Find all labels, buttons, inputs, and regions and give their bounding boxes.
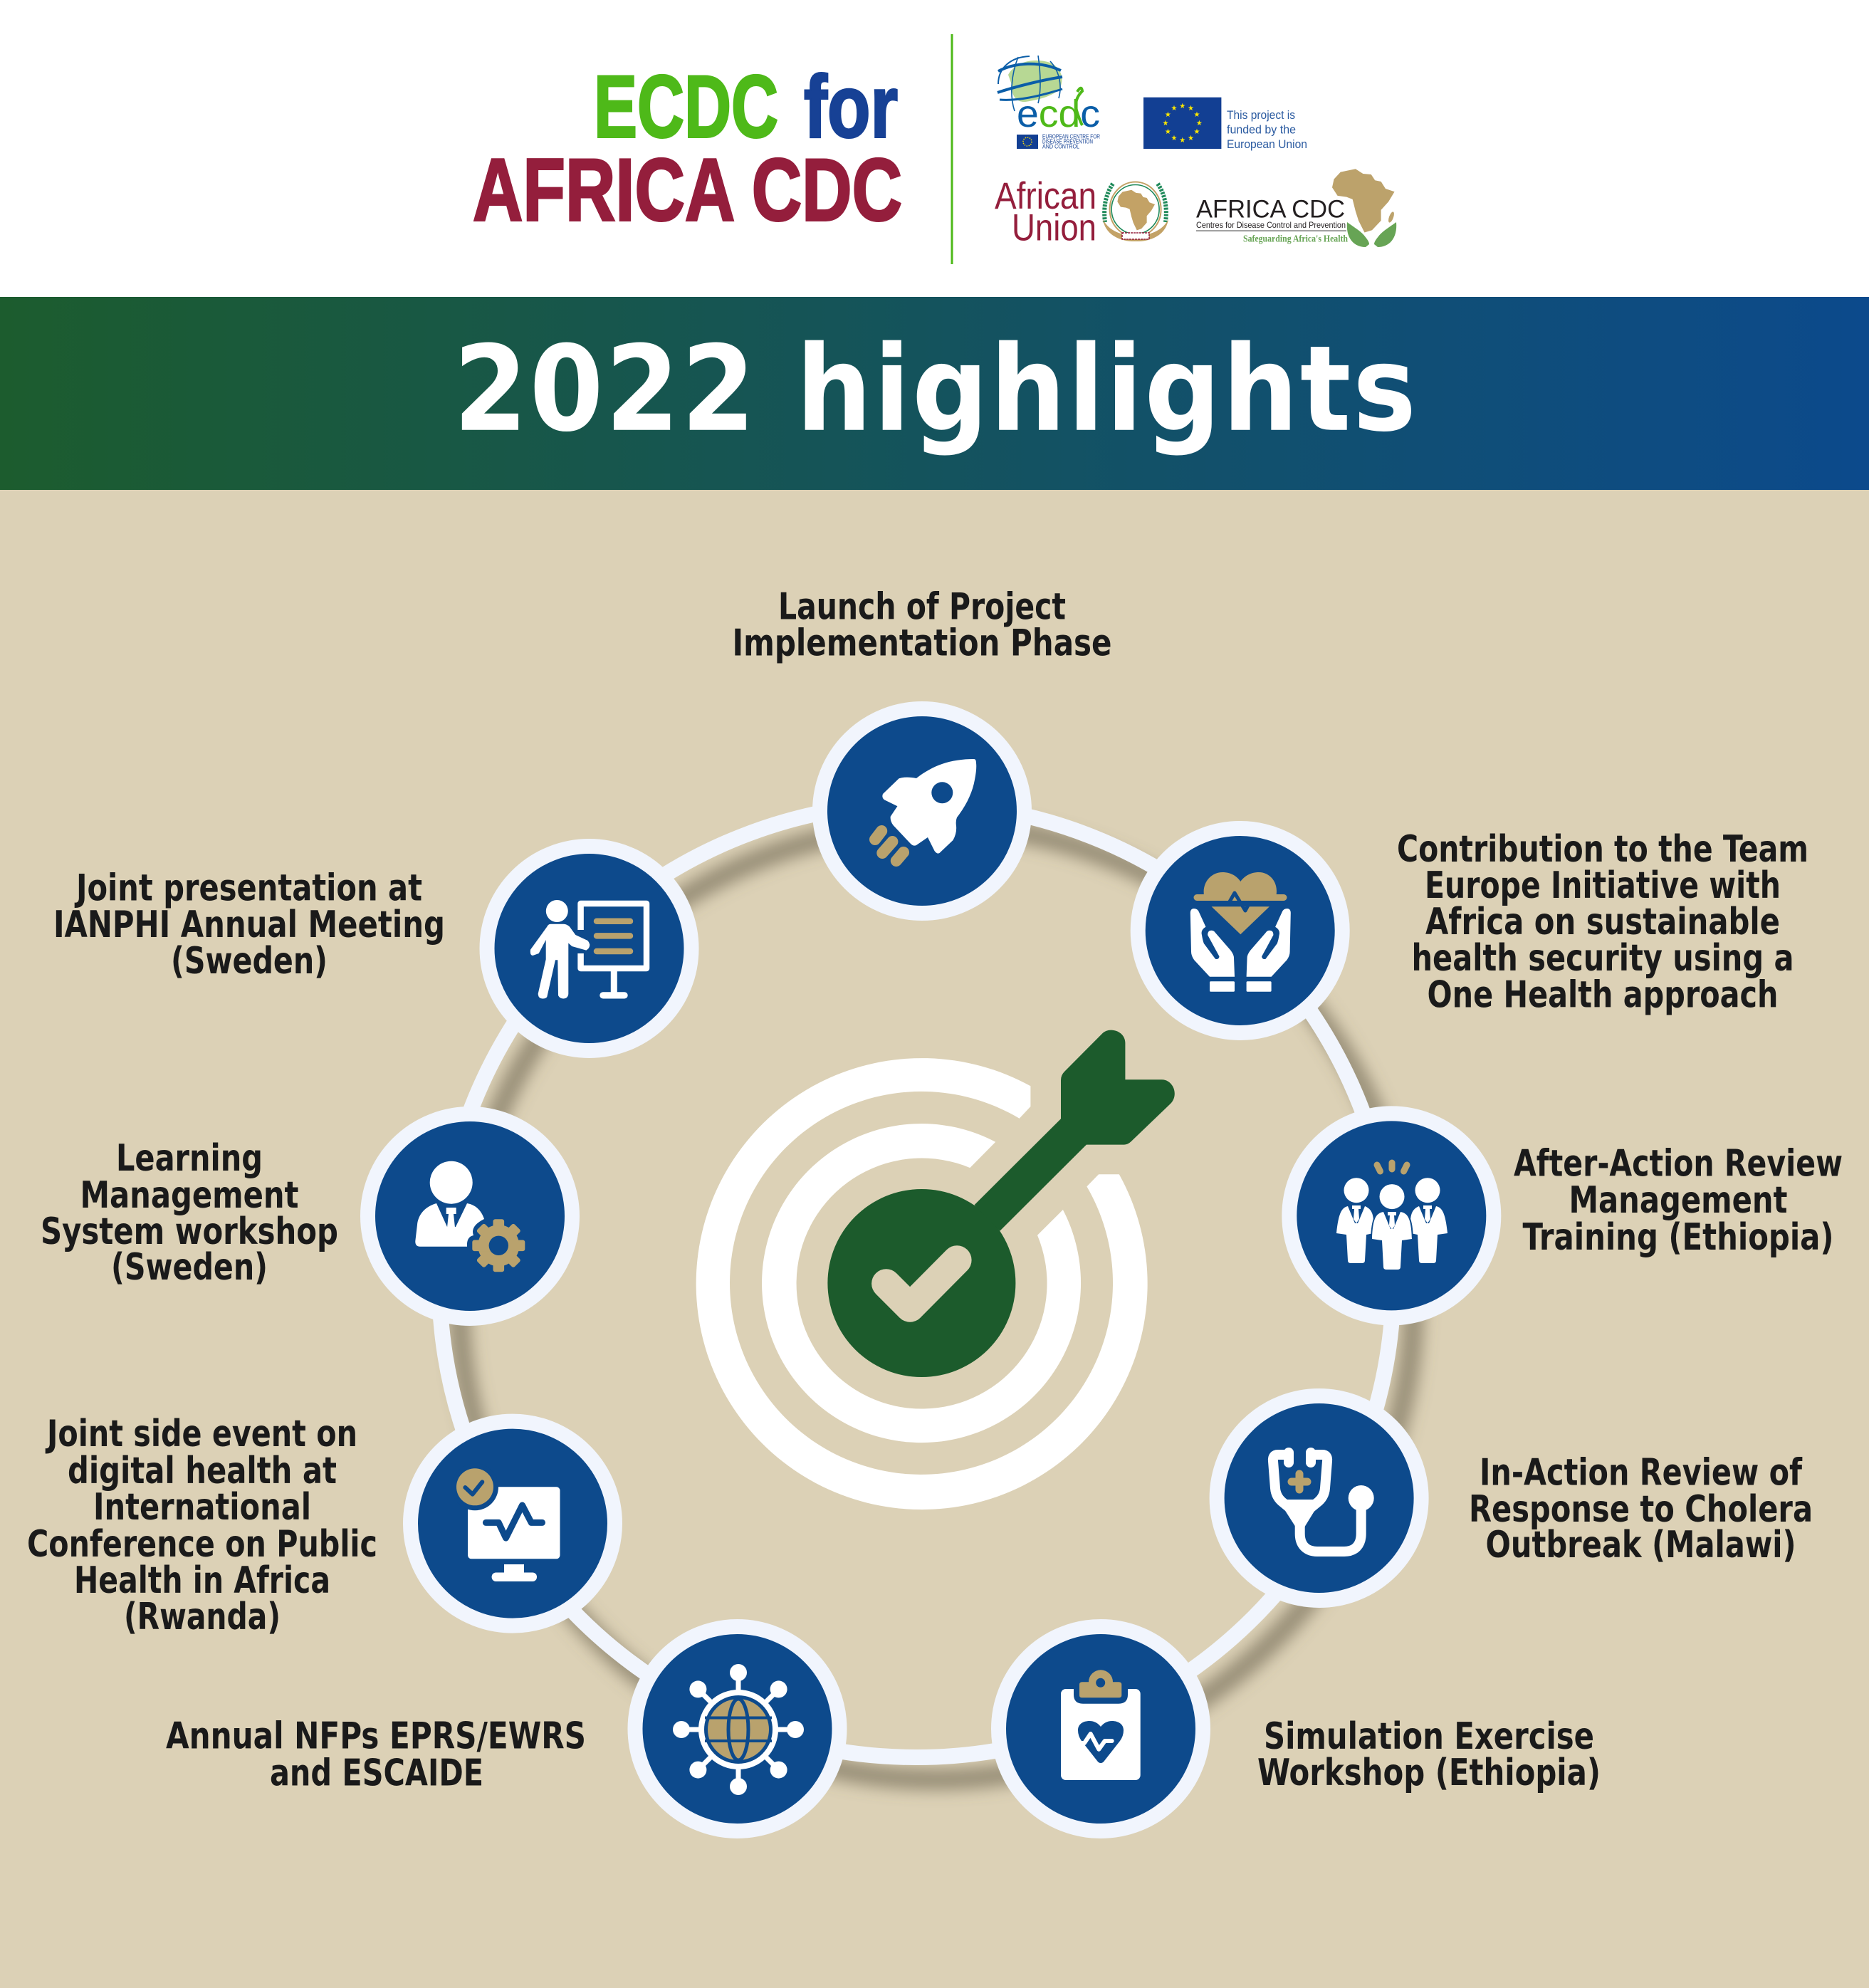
label: Joint side event on digital health: Health in Africa: [74, 1559, 330, 1602]
label: Learning Management System workshop: Management: [80, 1174, 299, 1217]
label: Annual NFPs EPRS/EWRS and ESCAIDE: and ESCAIDE: [270, 1752, 483, 1794]
logo: EU flag with funding note: ★: [1196, 120, 1203, 127]
logo: EU flag with funding note: ★: [1188, 135, 1194, 142]
title: ECDC for Africa CDC: ECDC: [594, 58, 778, 157]
logo: EU flag with funding note: European Union: [1227, 137, 1307, 151]
node 1: rocket: [820, 709, 1024, 913]
icon: person and gear: [415, 1161, 525, 1272]
node 6: networked globe: [635, 1626, 839, 1831]
logo: EU flag with funding note: [1143, 98, 1307, 151]
banner: 2022 highlights: 2022 highlights: [454, 321, 1416, 459]
node 5: clipboard with heart: [998, 1626, 1203, 1831]
label: Contribution to the Team Europe Initiative: One Health approach: [1427, 974, 1779, 1017]
label: Joint side event on digital health: International: [93, 1486, 311, 1529]
logo: African Union: [995, 175, 1168, 249]
label: Simulation Exercise Workshop: Simulation Exercise: [1264, 1715, 1594, 1758]
label: Simulation Exercise Workshop: Workshop (Ethiopia): [1257, 1752, 1601, 1794]
label: Joint presentation at IANPHI: (Sweden): [171, 940, 328, 983]
logo: EU flag with funding note: ★: [1194, 128, 1200, 136]
label: Learning Management System workshop: (Sweden): [111, 1246, 268, 1289]
logo: ECDC: AND CONTROL: [1042, 144, 1079, 150]
icon: clipboard: [1061, 1670, 1141, 1780]
label: After-Action Review Management Training: Management: [1569, 1179, 1787, 1222]
icon: rocket: [875, 759, 976, 861]
label: In-Action Review of Response to Cholera: Outbreak (Malawi): [1485, 1524, 1796, 1566]
header divider line: [951, 34, 953, 264]
icon: people: [1336, 1163, 1447, 1270]
label: Joint presentation at IANPHI: [53, 867, 445, 983]
node 2: hands holding heart: [1138, 829, 1342, 1032]
label: Joint presentation at IANPHI: IANPHI Annual Meeting: [53, 904, 445, 946]
label: Learning Management System workshop: System workshop: [41, 1210, 338, 1253]
node 8: person with gear: [367, 1114, 572, 1319]
icon: presenter: [530, 900, 646, 998]
title: ECDC for Africa CDC: AFRICA CDC: [473, 141, 902, 239]
logo: EU flag with funding note: This project is: [1227, 108, 1295, 122]
label: After-Action Review Management Training: [1514, 1142, 1843, 1259]
label: Contribution to the Team Europe Initiative: health security using a: [1411, 937, 1794, 980]
label: Contribution to the Team Europe Initiative: Europe Initiative with: [1425, 864, 1781, 907]
icon: hands and heart: [1190, 872, 1291, 992]
label: After-Action Review Management Training: Training (Ethiopia): [1522, 1216, 1834, 1259]
logo: ECDC: EUROPEAN CENTRE FOR: [1042, 134, 1100, 140]
label: Learning Management System workshop: Learning: [116, 1137, 263, 1180]
banner: 2022 highlights: [0, 297, 1869, 490]
logo: ECDC: ecdc: [1017, 93, 1100, 135]
logo: ECDC: [998, 56, 1100, 150]
label: Contribution to the Team Europe Initiative: Contribution to the Team: [1397, 828, 1808, 871]
label: Launch of Project Implementation Phase: Implementation Phase: [732, 622, 1112, 665]
node 4: stethoscope: [1217, 1396, 1421, 1601]
label: Joint side event on digital health: Joint side event on: [45, 1413, 357, 1455]
header background: [0, 0, 1869, 297]
logo: Africa CDC: [1196, 169, 1396, 247]
icon: globe: [673, 1664, 804, 1795]
label: Joint side event on digital health: Conference on Public: [27, 1523, 377, 1566]
logo: EU flag with funding note: ★: [1165, 111, 1171, 119]
icon: monitor: [451, 1463, 560, 1581]
label: Contribution to the Team Europe Initiative: [1397, 828, 1808, 1017]
logo: African Union: Union: [1012, 207, 1096, 249]
connector ring shadow: [459, 825, 1413, 1779]
title: ECDC for Africa CDC: [473, 58, 902, 239]
logo: EU flag with funding note: ★: [1179, 103, 1185, 110]
logo: Africa CDC: Safeguarding Africa's Health: [1243, 233, 1348, 244]
title: ECDC for Africa CDC: for: [804, 58, 898, 157]
logo: EU flag with funding note: ★: [1188, 105, 1194, 113]
label: Contribution to the Team Europe Initiative: Africa on sustainable: [1425, 901, 1780, 943]
connector ring: [439, 803, 1393, 1757]
logo: ECDC: DISEASE PREVENTION: [1042, 138, 1093, 145]
label: Joint presentation at IANPHI: Joint presentation at: [74, 867, 422, 910]
label: Joint side event on digital health: [27, 1413, 377, 1638]
logo: EU flag with funding note: ★: [1165, 128, 1171, 136]
label: Joint side event on digital health: digital health at: [68, 1450, 337, 1492]
label: Launch of Project Implementation Phase: [732, 585, 1112, 665]
logo: EU flag with funding note: funded by the: [1227, 123, 1296, 137]
label: In-Action Review of Response to Cholera: Response to Cholera: [1469, 1488, 1813, 1531]
logo: EU flag with funding note: ★: [1171, 105, 1178, 113]
label: Annual NFPs EPRS/EWRS and ESCAIDE: [166, 1715, 586, 1794]
label: Launch of Project Implementation Phase: Launch of Project: [778, 585, 1066, 628]
node 3: team of three: [1289, 1114, 1494, 1318]
node 7: health monitor: [410, 1421, 615, 1626]
logo: EU flag with funding note: ★: [1179, 137, 1185, 145]
sand background panel: [0, 490, 1869, 1988]
label: Annual NFPs EPRS/EWRS and ESCAIDE: Annual NFPs EPRS/EWRS: [166, 1715, 586, 1757]
label: In-Action Review of Response to Cholera: In-Action Review of: [1480, 1451, 1803, 1494]
logo: Africa CDC: AFRICA CDC: [1196, 196, 1345, 224]
label: In-Action Review of Response to Cholera: [1469, 1451, 1813, 1566]
node 9: presenter at board: [487, 846, 691, 1051]
label: Joint side event on digital health: (Rwanda): [124, 1596, 281, 1638]
logo: Africa CDC: Centres for Disease Control and Prevention: [1196, 220, 1346, 230]
logo: EU flag with funding note: ★: [1163, 120, 1169, 127]
logo: EU flag with funding note: ★: [1171, 135, 1178, 142]
icon: stethoscope: [1273, 1453, 1374, 1552]
central target with arrow: [696, 1030, 1175, 1510]
logo: EU flag with funding note: ★: [1194, 111, 1200, 119]
logo: African Union: African: [995, 175, 1096, 217]
label: Simulation Exercise Workshop: [1257, 1715, 1601, 1794]
label: Learning Management System workshop: [41, 1137, 338, 1289]
